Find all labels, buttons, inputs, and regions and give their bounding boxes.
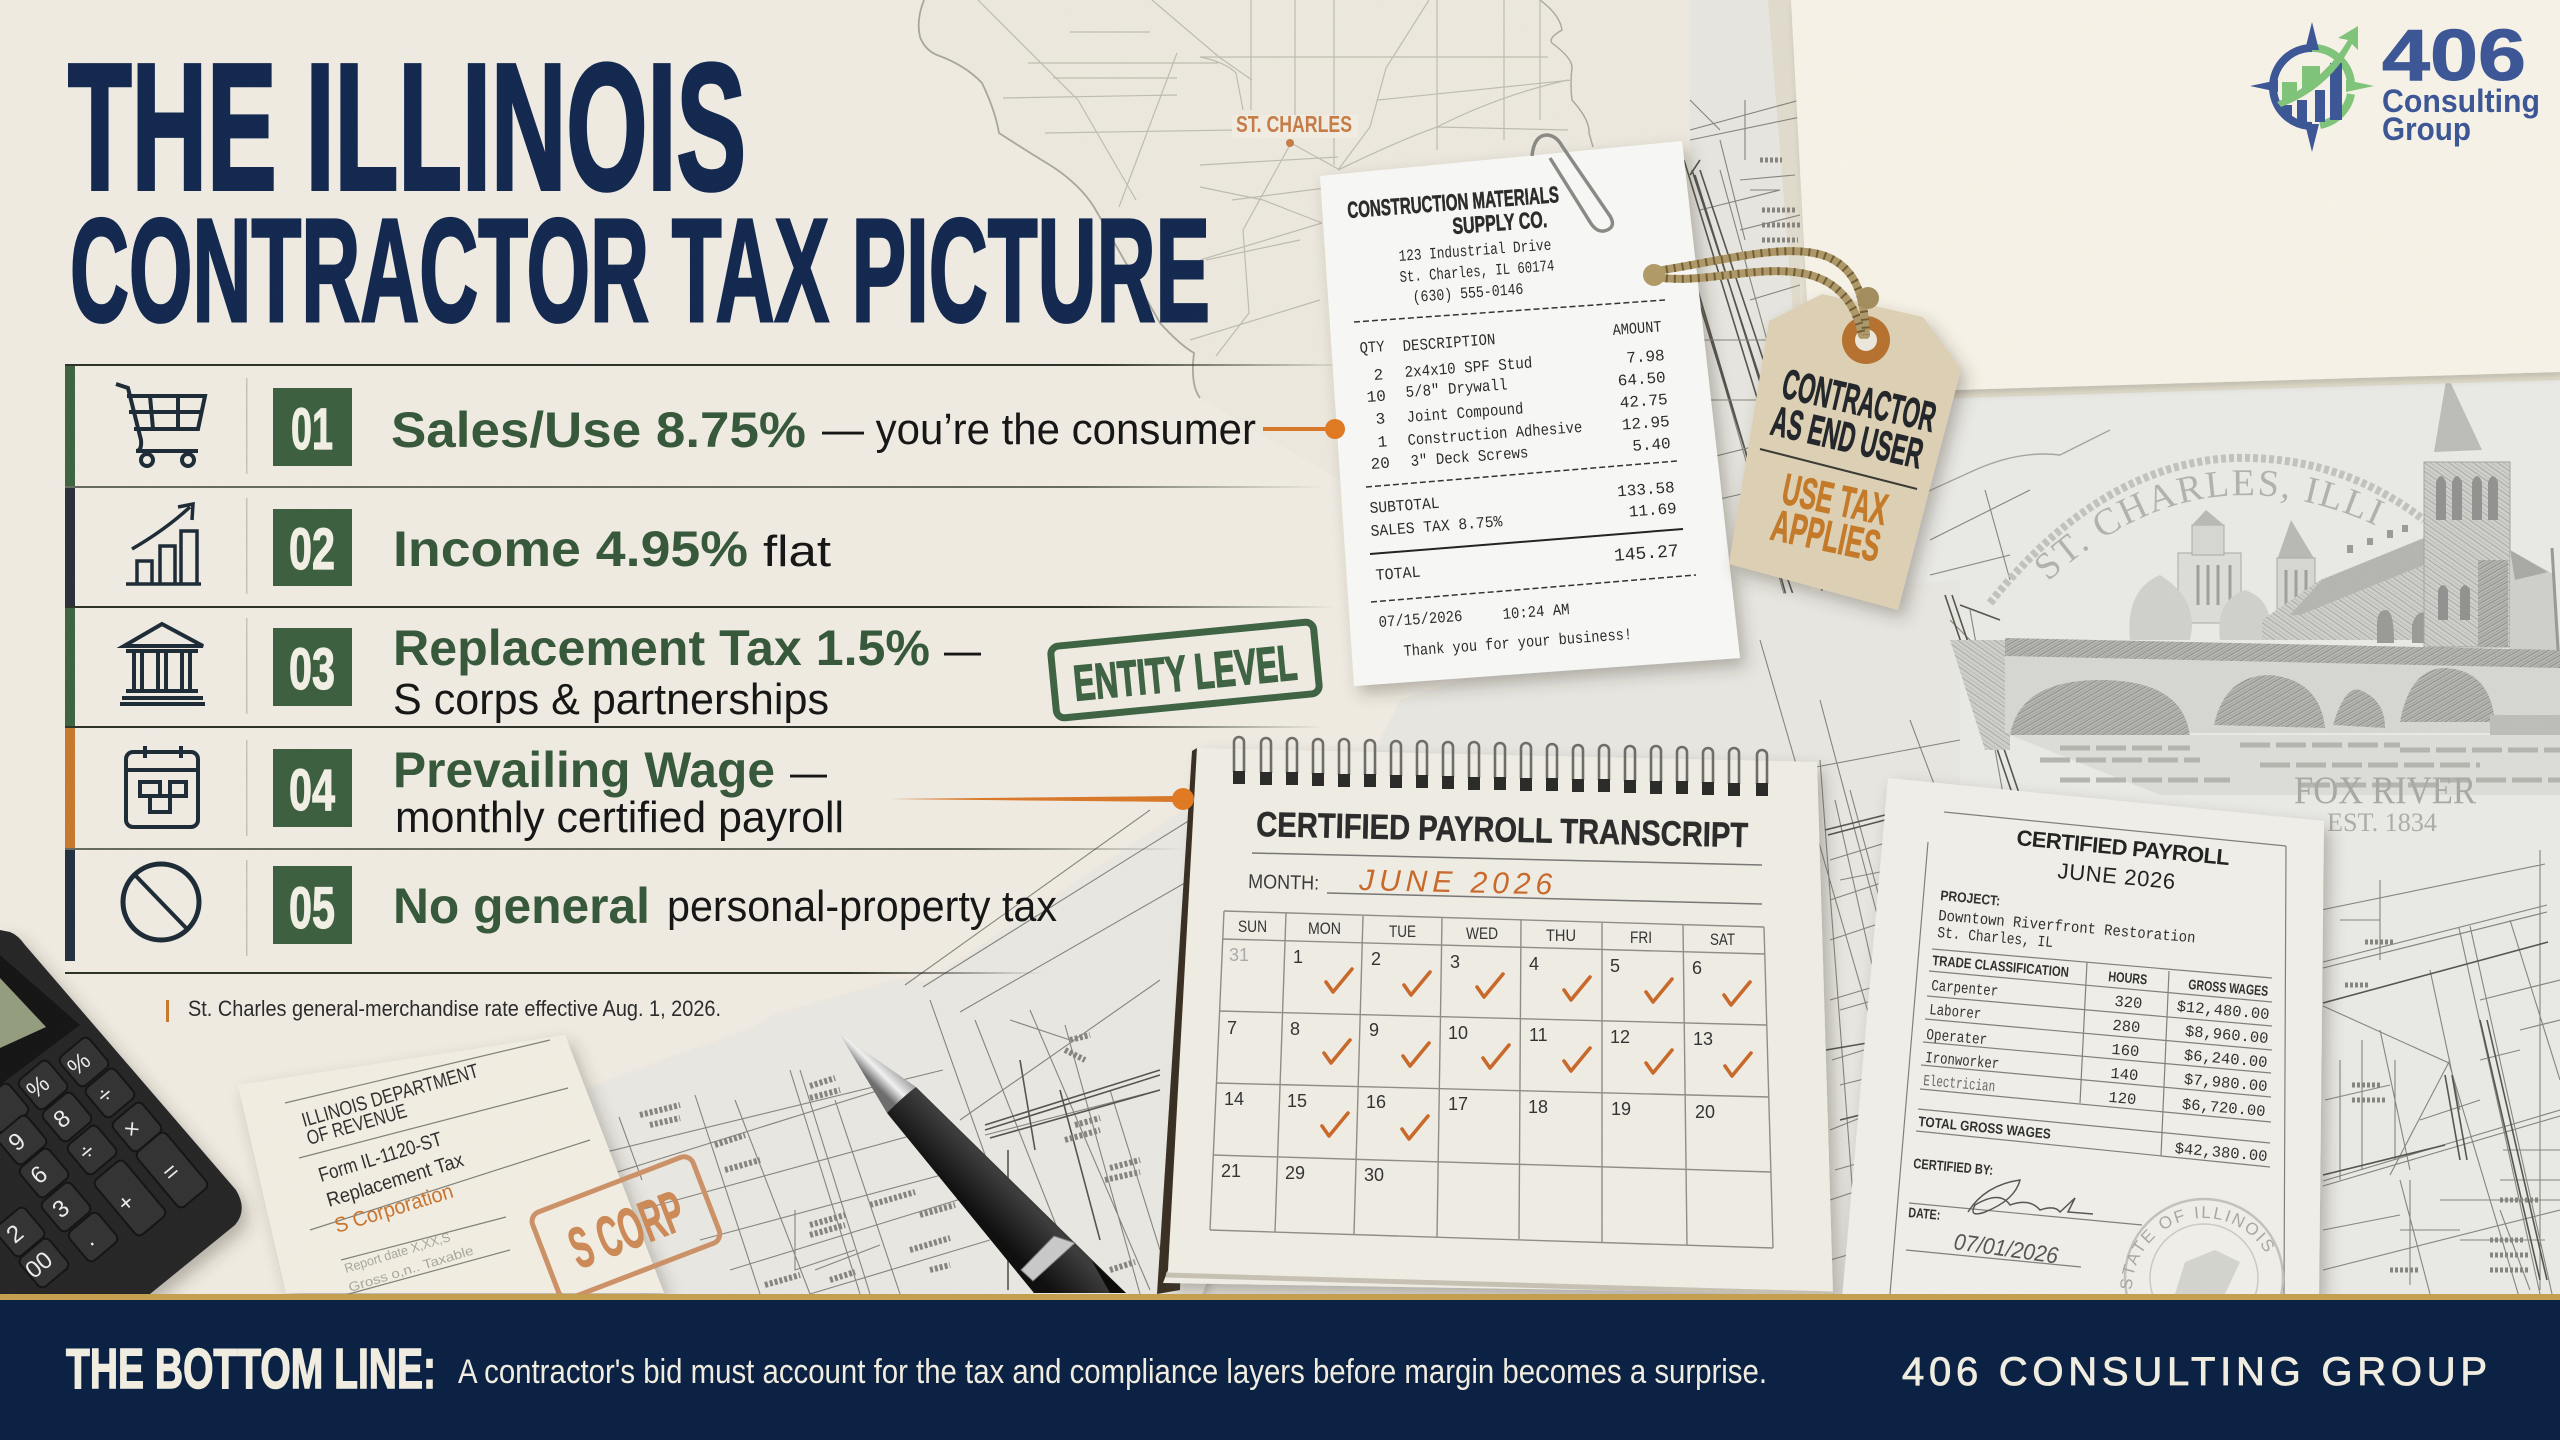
- certified payroll calendar notebook: 2: [1371, 949, 1381, 969]
- receipt: 5.40: [1632, 435, 1671, 456]
- row 3: replacement tax: 03: [289, 637, 335, 702]
- certified payroll document: $42,380.00: [2174, 1140, 2268, 1166]
- price tag: contractor as end user: CONTRACTOR: [1778, 360, 1941, 441]
- certified payroll calendar notebook: 8: [1290, 1019, 1300, 1039]
- certified payroll calendar notebook: TUE: [1389, 922, 1416, 941]
- row 3: replacement tax: [65, 608, 981, 726]
- receipt: QTY: [1359, 338, 1386, 358]
- receipt: 42.75: [1619, 391, 1668, 413]
- receipt: SUBTOTAL: [1369, 495, 1440, 518]
- certified payroll calendar notebook: 18: [1528, 1097, 1548, 1117]
- certified payroll calendar notebook: MON: [1308, 919, 1341, 938]
- twine: [1643, 251, 1879, 335]
- certified payroll calendar notebook: 13: [1693, 1029, 1713, 1049]
- row 1: sales and use tax: Sales/Use 8.75%: [391, 402, 806, 458]
- Illinois Department of Revenue form: Form IL-1120-ST: [316, 1128, 445, 1187]
- receipt: St. Charles, IL 60174: [1399, 257, 1555, 287]
- certified payroll document: $12,480.00: [2176, 998, 2270, 1024]
- calculator: 6: [25, 1161, 53, 1190]
- certified payroll calendar notebook: 7: [1227, 1018, 1237, 1038]
- price tag: contractor as end user: USE TAX: [1778, 465, 1892, 535]
- certified payroll calendar notebook: 11: [1529, 1025, 1548, 1045]
- receipt: 3: [1375, 410, 1386, 429]
- certified payroll calendar notebook: [889, 737, 1833, 1294]
- price tag: contractor as end user: AS END USER: [1767, 397, 1928, 477]
- certified payroll calendar notebook: JUNE 2026: [1358, 864, 1553, 901]
- certified payroll calendar notebook: 12: [1610, 1027, 1630, 1047]
- stamp: entity level: ENTITY LEVEL: [1071, 634, 1299, 712]
- certified payroll document: $6,720.00: [2181, 1096, 2266, 1121]
- logo: 406 Consulting Group: 406: [2382, 16, 2526, 96]
- Illinois Department of Revenue form: [238, 1035, 664, 1295]
- stone bridge over the river: [1950, 638, 2560, 795]
- row 2: income tax: flat: [763, 527, 831, 576]
- certified payroll document: $6,240.00: [2183, 1047, 2268, 1072]
- certified payroll calendar notebook: 3: [1450, 952, 1460, 972]
- price tag: contractor as end user: APPLIES: [1767, 501, 1885, 572]
- certified payroll calendar notebook: 15: [1287, 1091, 1307, 1111]
- certified payroll calendar notebook: 16: [1366, 1092, 1386, 1112]
- receipt: 10: [1366, 388, 1387, 407]
- calculator: .: [77, 1227, 99, 1252]
- certified payroll document: GROSS WAGES: [2188, 976, 2269, 999]
- row 5: no personal-property tax: No general: [393, 878, 650, 934]
- icon: prohibition sign: [123, 864, 199, 940]
- receipt: 123 Industrial Drive: [1398, 237, 1552, 266]
- row 3: replacement tax: S corps & partnerships: [393, 675, 829, 724]
- row 5: no personal-property tax: personal-property tax: [667, 882, 1057, 931]
- stamp: S Corp: [529, 1154, 723, 1301]
- calculator: =: [157, 1157, 185, 1187]
- certified payroll document: CERTIFIED PAYROLL: [2016, 825, 2231, 870]
- certified payroll calendar notebook: 21: [1221, 1161, 1241, 1181]
- calculator: ÷: [73, 1138, 101, 1167]
- map label: St. Charles: [1232, 111, 1358, 147]
- receipt: 5/8" Drywall: [1405, 376, 1508, 402]
- receipt: CONSTRUCTION MATERIALS: [1346, 181, 1560, 223]
- title: [68, 27, 1210, 353]
- row dividers: [65, 364, 1355, 974]
- row 1: sales and use tax: [65, 366, 1256, 486]
- calculator: 3: [47, 1195, 75, 1224]
- receipt: 20: [1370, 455, 1391, 474]
- certified payroll calendar notebook: 6: [1692, 958, 1702, 978]
- certified payroll document: [1840, 778, 2339, 1294]
- certified payroll calendar notebook: 1: [1293, 947, 1303, 967]
- certified payroll calendar notebook: 29: [1285, 1163, 1305, 1183]
- blueprint: bottom centre sheets: [585, 780, 1350, 1300]
- certified payroll calendar notebook: 17: [1448, 1094, 1468, 1114]
- certified payroll document: 160: [2111, 1041, 2140, 1061]
- certified payroll document: St. Charles, IL: [1937, 924, 2054, 952]
- receipt: SALES TAX 8.75%: [1370, 513, 1503, 541]
- Illinois Department of Revenue form: Replacement Tax: [324, 1149, 466, 1212]
- receipt: 7.98: [1626, 347, 1665, 368]
- certified payroll document: $8,960.00: [2184, 1023, 2269, 1048]
- certified payroll document: 120: [2108, 1089, 2137, 1109]
- certified payroll calendar notebook: 9: [1369, 1020, 1379, 1040]
- signature: [1968, 1180, 2093, 1214]
- certified payroll calendar notebook: WED: [1466, 924, 1498, 943]
- receipt: AMOUNT: [1612, 318, 1662, 340]
- row 3: replacement tax: —: [944, 626, 981, 675]
- certified payroll calendar notebook: 19: [1611, 1099, 1631, 1119]
- certified payroll calendar notebook: 10: [1448, 1023, 1468, 1043]
- Illinois Department of Revenue form: ILLINOIS DEPARTMENT: [299, 1060, 481, 1132]
- certified payroll calendar notebook: 4: [1529, 954, 1539, 974]
- background blueprint: upper strip: [1680, 0, 1880, 720]
- calculator: [0, 930, 242, 1294]
- receipt: 11.69: [1628, 500, 1677, 522]
- certified payroll document: Electrician: [1923, 1072, 1996, 1096]
- bottom banner: 406 CONSULTING GROUP: [1902, 1350, 2487, 1394]
- certified payroll calendar notebook: 5: [1610, 956, 1620, 976]
- stamp: S Corp: S CORP: [560, 1178, 694, 1281]
- receipt: (630) 555-0146: [1412, 281, 1524, 307]
- Illinois Department of Revenue form: Report date X,XX,S: [342, 1229, 452, 1276]
- title: THE ILLINOIS: [68, 27, 746, 228]
- receipt: 64.50: [1617, 369, 1666, 391]
- row 4: prevailing wage: Prevailing Wage: [393, 742, 775, 798]
- calendar grid: [1210, 911, 1773, 1248]
- calculator: %: [62, 1047, 96, 1081]
- receipt: 07/15/2026: [1378, 608, 1463, 632]
- certified payroll calendar notebook: 14: [1224, 1089, 1244, 1109]
- certified payroll document: 140: [2110, 1065, 2139, 1085]
- stamp: entity level: [1050, 622, 1320, 718]
- certified payroll calendar notebook: 31: [1229, 945, 1249, 965]
- certified payroll document: DATE:: [1908, 1204, 1941, 1223]
- top-right cream paper: [1791, 0, 2560, 400]
- footnote: St. Charles general-merchandise rate effective Aug. 1, 2026.: [188, 996, 721, 1021]
- certified payroll document: Downtown Riverfront Restoration: [1938, 907, 2196, 947]
- receipt: 133.58: [1617, 479, 1675, 501]
- bottom banner: [0, 1294, 2560, 1440]
- row 3: replacement tax: Replacement Tax 1.5%: [393, 620, 930, 676]
- row 1: sales and use tax: — you’re the consumer: [822, 405, 1256, 454]
- row 2: income tax: 02: [289, 517, 335, 582]
- certified payroll document: PROJECT:: [1940, 887, 2001, 909]
- calculator: 9: [3, 1128, 31, 1157]
- spiral binding: [1233, 737, 1768, 796]
- logo: 406 Consulting Group: [2250, 16, 2540, 152]
- title: CONTRACTOR TAX PICTURE: [70, 189, 1210, 353]
- logo: 406 Consulting Group: Group: [2382, 111, 2471, 147]
- certified payroll calendar notebook: THU: [1546, 926, 1576, 945]
- map label: St. Charles: ST. CHARLES: [1236, 111, 1352, 137]
- receipt: Thank you for your business!: [1403, 626, 1633, 661]
- certified payroll calendar notebook: MONTH:: [1248, 871, 1319, 895]
- certified payroll calendar notebook: SAT: [1710, 930, 1735, 949]
- Illinois Department of Revenue form: OF REVENUE: [304, 1100, 409, 1150]
- certified payroll document: HOURS: [2108, 968, 2148, 987]
- state of Illinois seal: STATE OF ILLINOIS: [2120, 1206, 2274, 1289]
- price tag: contractor as end user: [1643, 251, 1961, 610]
- certified payroll calendar notebook: 20: [1695, 1102, 1715, 1122]
- receipt: DESCRIPTION: [1402, 331, 1496, 356]
- row 4: prevailing wage: [65, 728, 844, 848]
- calculator: 8: [48, 1105, 76, 1134]
- row 5: no personal-property tax: 05: [289, 876, 335, 941]
- certified payroll document: $7,980.00: [2183, 1071, 2268, 1096]
- paper clip: [1532, 135, 1612, 231]
- calculator: ÷: [91, 1081, 119, 1110]
- certified payroll document: JUNE 2026: [2057, 858, 2176, 894]
- row 2: income tax: Income 4.95%: [393, 521, 748, 577]
- icon: shopping cart: [116, 384, 205, 466]
- icon: compass with chart: [2250, 22, 2374, 152]
- icon: bank building: [120, 624, 205, 704]
- certified payroll document: TOTAL GROSS WAGES: [1918, 1113, 2052, 1142]
- row 4: prevailing wage: 04: [289, 758, 335, 823]
- receipt: 2x4x10 SPF Stud: [1404, 354, 1533, 382]
- logo: 406 Consulting Group: Consulting: [2382, 83, 2540, 119]
- Illinois Department of Revenue form: S Corporation: [332, 1180, 456, 1238]
- background map of Illinois: [919, 0, 1700, 600]
- certified payroll document: TRADE CLASSIFICATION: [1932, 952, 2070, 980]
- receipt: 2: [1373, 366, 1384, 385]
- receipt: SUPPLY CO.: [1451, 206, 1548, 239]
- text: Fox River: FOX RIVER: [2294, 769, 2476, 812]
- calculator: 2: [1, 1220, 29, 1249]
- St. Charles town sketch: [1929, 383, 2560, 837]
- arrow: sales tax to receipt: [1263, 419, 1345, 439]
- row 2: income tax: [65, 488, 831, 606]
- certified payroll calendar notebook: 30: [1364, 1165, 1384, 1185]
- receipt: Joint Compound: [1406, 400, 1524, 427]
- certified payroll document: Laborer: [1929, 1001, 1982, 1024]
- calculator: 00: [20, 1246, 58, 1284]
- receipt: 145.27: [1613, 542, 1679, 567]
- orange check marks: [1322, 969, 1751, 1139]
- calculator: %: [21, 1070, 55, 1104]
- row 4: prevailing wage: monthly certified payroll: [395, 793, 844, 842]
- bottom banner: A contractor's bid must account for the tax and compliance layers before margin becomes a surprise.: [458, 1353, 1767, 1391]
- receipt: 1: [1377, 433, 1388, 452]
- receipt: 12.95: [1621, 413, 1670, 435]
- bottom banner: THE BOTTOM LINE:: [66, 1337, 436, 1401]
- certified payroll document: CERTIFIED BY:: [1913, 1155, 1994, 1178]
- row 1: sales and use tax: 01: [291, 397, 333, 462]
- certified payroll document: 07/01/2026: [1952, 1228, 2060, 1269]
- certified payroll document: Operater: [1926, 1026, 1988, 1049]
- pen: [839, 1033, 1126, 1293]
- receipt: TOTAL: [1375, 564, 1421, 585]
- certified payroll document: Ironworker: [1925, 1049, 2000, 1073]
- text: est. 1834: EST. 1834: [2327, 808, 2437, 837]
- Illinois Department of Revenue form: Gross o,n.. Taxable: [346, 1243, 475, 1295]
- row 5: no personal-property tax: [65, 850, 1057, 961]
- receipt: [1320, 141, 1740, 686]
- receipt: Construction Adhesive: [1407, 419, 1583, 450]
- receipt: 10:24 AM: [1502, 601, 1570, 624]
- row 4: prevailing wage: —: [790, 748, 827, 797]
- calculator: ×: [118, 1114, 146, 1144]
- certified payroll calendar notebook: FRI: [1630, 928, 1652, 947]
- certified payroll calendar notebook: SUN: [1238, 917, 1267, 936]
- calculator: +: [112, 1188, 140, 1218]
- arrow: prevailing wage to calendar: [889, 788, 1194, 810]
- certified payroll calendar notebook: CERTIFIED PAYROLL TRANSCRIPT: [1256, 805, 1749, 855]
- icon: payroll calendar: [126, 746, 198, 827]
- certified payroll document: 280: [2112, 1017, 2141, 1037]
- background blueprint: large lower-right sheet: [1100, 372, 2560, 1300]
- certified payroll document: Carpenter: [1931, 977, 1999, 1001]
- certified payroll document: 320: [2114, 993, 2143, 1013]
- icon: rising bar chart: [126, 504, 201, 584]
- receipt: 3" Deck Screws: [1410, 444, 1529, 471]
